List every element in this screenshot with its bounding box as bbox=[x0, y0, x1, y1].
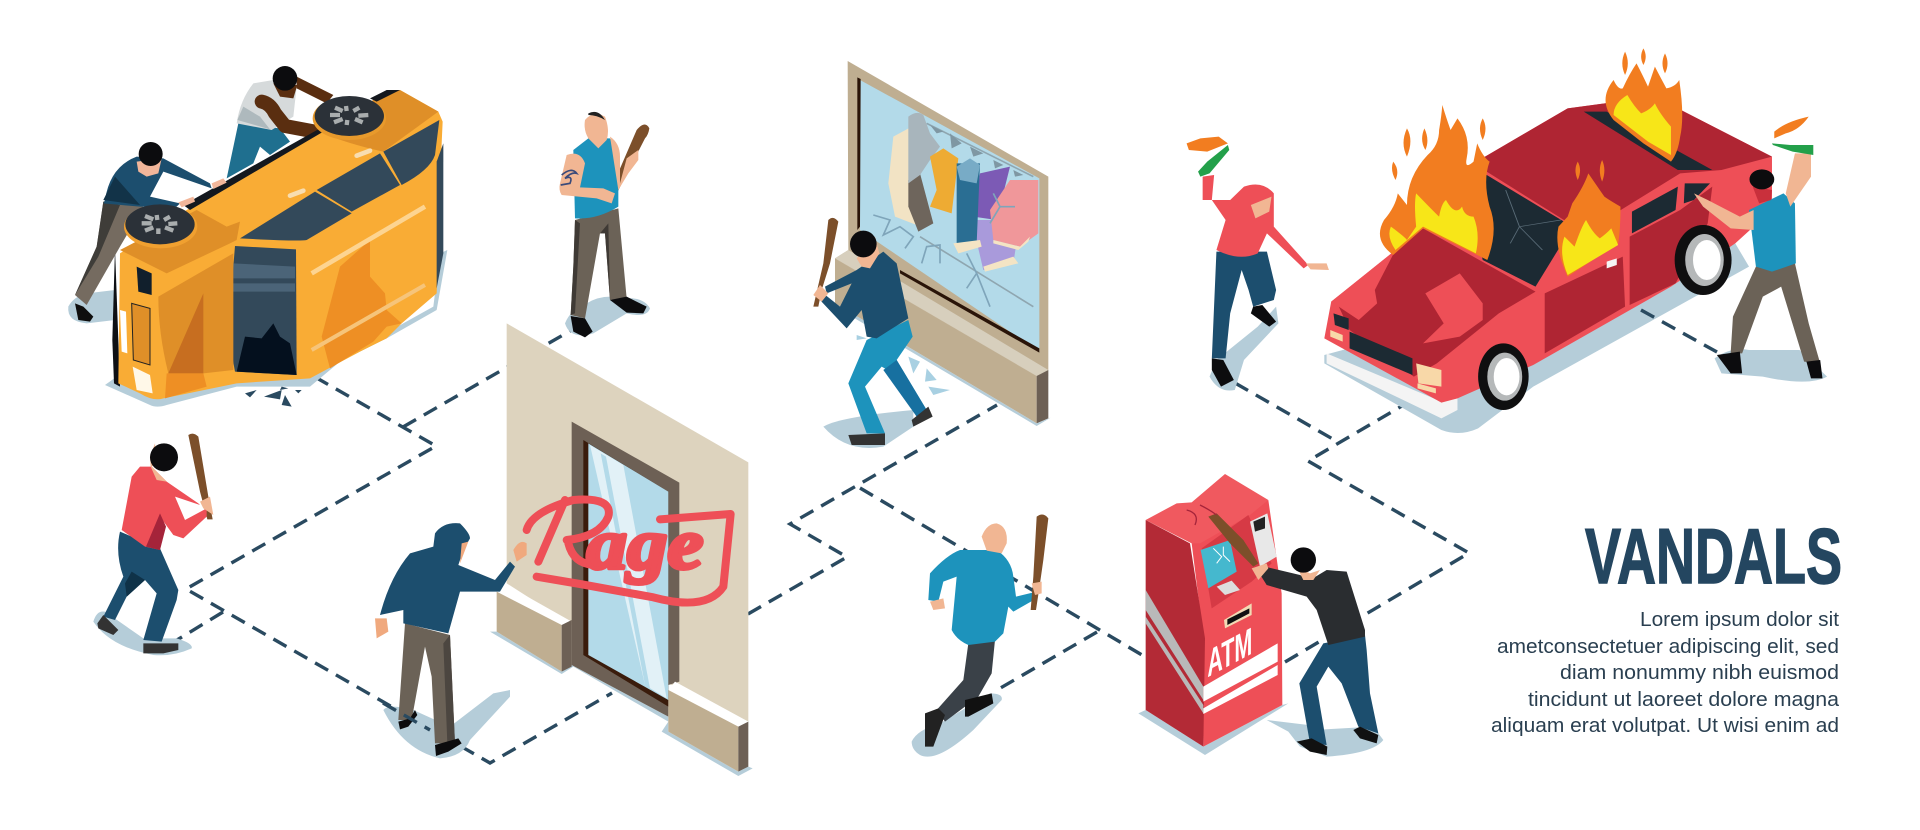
illustration: man in red sweater with bat bbox=[93, 434, 213, 655]
ATM label: ATM bbox=[1207, 619, 1252, 686]
window edges bbox=[857, 77, 1039, 353]
clothes on rail bbox=[888, 113, 1038, 307]
flame on door bbox=[1557, 160, 1620, 277]
man in blue shirt with bottle bbox=[1694, 117, 1827, 382]
illustration: graffiti wall with door and hooded man bbox=[375, 323, 753, 776]
flame on rear bbox=[1606, 48, 1682, 162]
description text block bbox=[1491, 609, 1840, 737]
description text block: aliquam erat volutpat. Ut wisi enim ad bbox=[1491, 715, 1839, 737]
illustration: burning red car with two men bbox=[1187, 48, 1827, 433]
car shadow bbox=[105, 250, 447, 407]
illustration: man with tattoo holding bat bbox=[559, 112, 650, 337]
front man bbox=[75, 142, 227, 322]
dashed lines crossing shadows bbox=[383, 310, 1717, 730]
window sill bbox=[835, 250, 1048, 376]
right plinth bbox=[668, 682, 748, 772]
flame on hood bbox=[1380, 105, 1494, 260]
hooded man bbox=[375, 523, 527, 758]
graffiti: age bbox=[587, 504, 703, 584]
car body bbox=[1324, 97, 1772, 403]
hooded person with bottle bbox=[1187, 137, 1329, 391]
man shadow bbox=[68, 290, 115, 323]
falling shards bbox=[857, 335, 950, 395]
running man bbox=[912, 515, 1048, 757]
illustration: overturned yellow car with two men bbox=[68, 66, 447, 407]
wheels bbox=[124, 96, 386, 248]
graffiti bbox=[527, 500, 731, 603]
man pushing bat bbox=[1252, 547, 1383, 757]
man with bat bbox=[813, 218, 933, 448]
rear man bbox=[227, 66, 333, 178]
glass bbox=[860, 80, 1039, 352]
bumper bbox=[1327, 353, 1457, 418]
frame bbox=[835, 61, 1048, 376]
cracks bbox=[873, 193, 1015, 307]
description text block: ametconsectetuer adipiscing elit, sed bbox=[1497, 636, 1839, 658]
illustration: running man and broken ATM bbox=[912, 474, 1383, 757]
ATM bbox=[1138, 474, 1288, 755]
wall plinths bbox=[490, 585, 753, 776]
illustration: shop window with clothes and man with bat bbox=[813, 61, 1051, 448]
door bbox=[572, 422, 679, 717]
wall bbox=[507, 323, 748, 722]
dashed connector lines bbox=[177, 331, 1469, 763]
description text block: tincidunt ut laoreet dolore magna bbox=[1528, 689, 1840, 711]
description text block: Lorem ipsum dolor sit bbox=[1640, 609, 1839, 631]
description text block: diam nonummy nibh euismod bbox=[1560, 662, 1839, 684]
wheels bbox=[1478, 225, 1732, 410]
glass shards bbox=[245, 387, 302, 407]
car body bbox=[112, 90, 443, 399]
car shadow bbox=[1324, 243, 1749, 433]
